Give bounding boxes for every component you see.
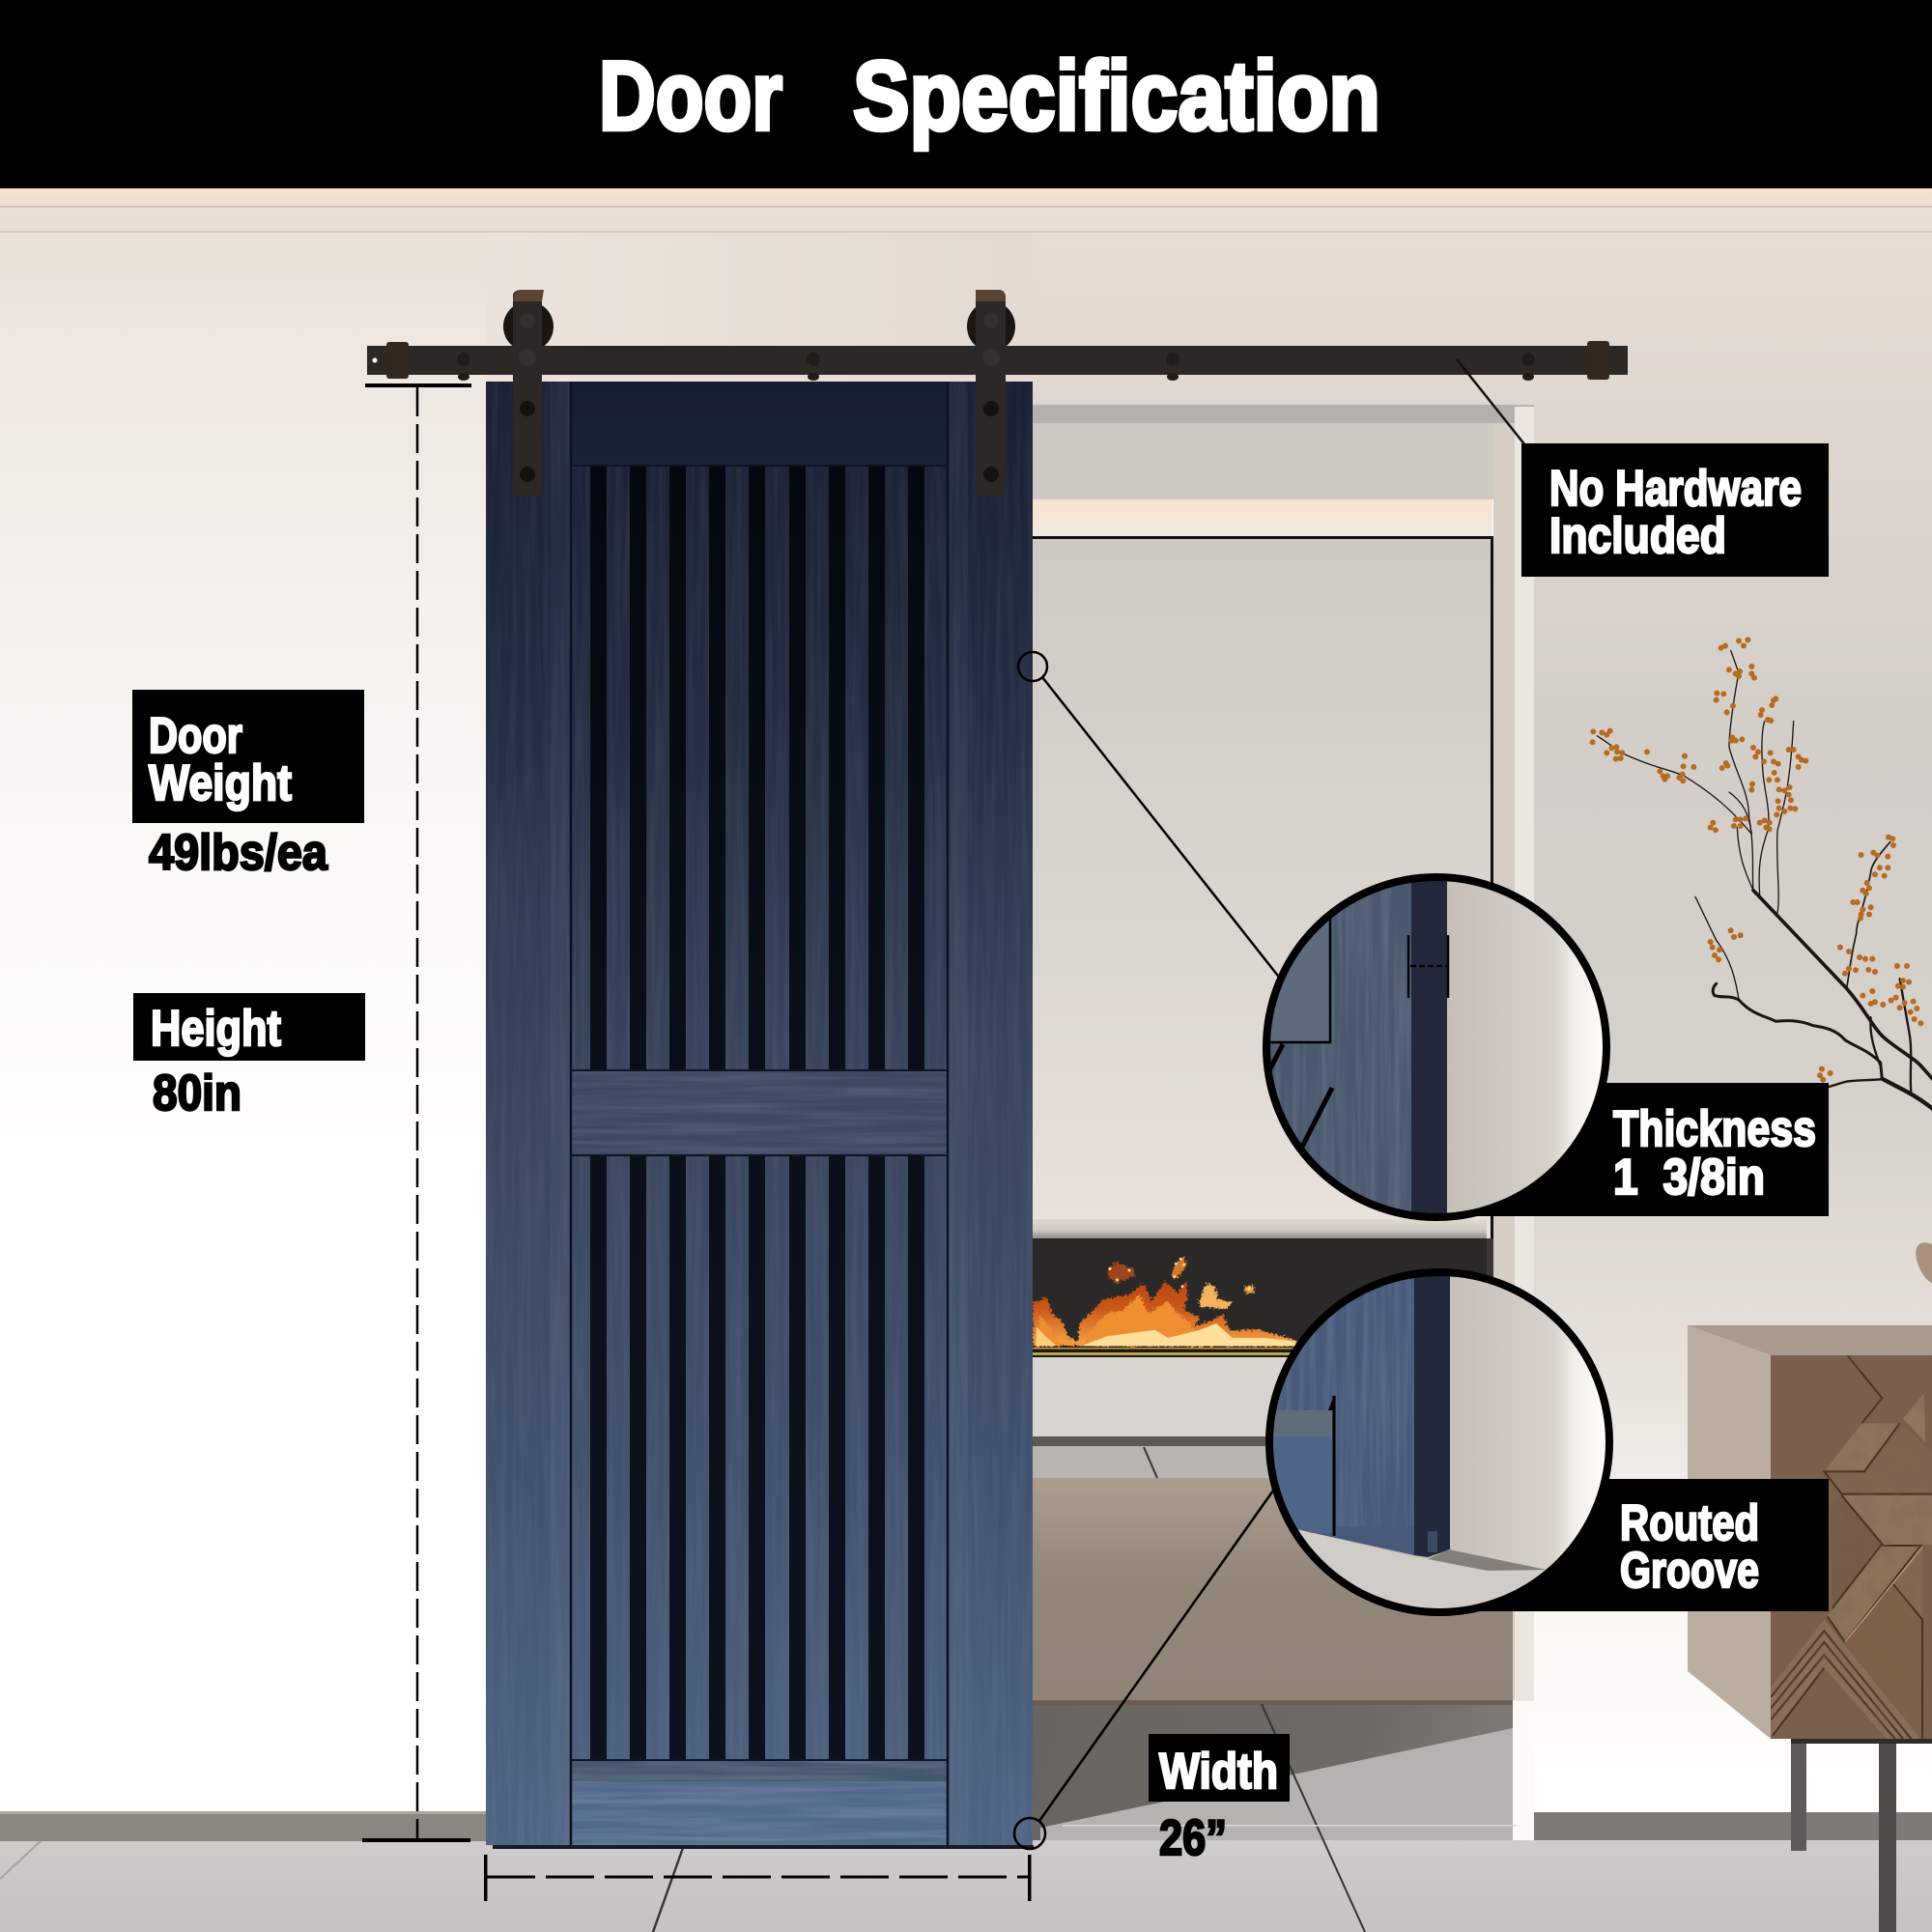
cabinet: [1688, 1242, 1932, 1932]
label: thickness: 1 3/8in: [1613, 1150, 1765, 1206]
label: door weight: Door: [149, 708, 242, 764]
width dimension line: [484, 1855, 1032, 1901]
upper slat gaps: [590, 466, 924, 1070]
bowl: [1916, 1242, 1932, 1283]
label: routed groove: Routed: [1620, 1495, 1759, 1551]
decorative branch with berries: [1593, 639, 1932, 1111]
cabinet relief pattern: [1771, 1355, 1932, 1739]
middle rail: [571, 1070, 948, 1155]
barn door track and hangers: [367, 290, 1628, 496]
doorway and interior room: [1033, 405, 1534, 1932]
title text: Door: [599, 43, 782, 151]
value: weight: 49lbs/ea: [149, 825, 328, 881]
cabinet legs: [1791, 1739, 1932, 1932]
callout marker: thickness: [1018, 652, 1281, 980]
branch stems: [1597, 650, 1932, 1111]
label: thickness: [1449, 1083, 1829, 1216]
label: routed groove: [1449, 1479, 1829, 1611]
wood grain: [486, 382, 1033, 1845]
left hanger strap: [513, 290, 544, 496]
title banner: [0, 0, 1932, 188]
label: height: Height: [151, 1001, 281, 1057]
detail circle: routed groove: [1256, 1265, 1623, 1623]
title text: Specification: [853, 43, 1380, 151]
label: no hardware included: No Hardware: [1549, 461, 1802, 517]
flames: [1033, 1256, 1296, 1346]
height dimension line: [362, 384, 471, 1842]
detail circle: door edge thickness: [1256, 869, 1623, 1227]
right hanger strap: [976, 290, 1006, 496]
lower slat gaps: [590, 1155, 924, 1760]
label: no hardware included: [1521, 443, 1829, 577]
stile bevels: [551, 382, 968, 1845]
label: width: Width: [1159, 1744, 1278, 1800]
label: door weight: [132, 690, 364, 823]
label: no hardware included: Included: [1549, 508, 1726, 564]
fireplace: [1033, 1219, 1493, 1479]
callout leader: hardware: [1457, 359, 1525, 445]
title text: [599, 43, 1380, 151]
value: width: 26”: [1159, 1810, 1227, 1866]
rail bolts: [457, 353, 1535, 381]
value: height: 80in: [153, 1065, 242, 1122]
rail grain: [571, 1070, 948, 1845]
label: door weight: Weight: [149, 755, 292, 811]
callout marker: routed groove: [1014, 1491, 1273, 1849]
berries: [1593, 639, 1920, 1080]
label: routed groove: Groove: [1620, 1543, 1759, 1599]
door: [486, 382, 1034, 1849]
wheels: [503, 301, 1015, 352]
rail brackets: [386, 341, 1609, 380]
rail: [367, 346, 1628, 375]
label: height: [133, 993, 365, 1061]
top rail: [571, 382, 948, 466]
bottom rail: [571, 1760, 948, 1845]
label: thickness: Thickness: [1613, 1101, 1816, 1157]
